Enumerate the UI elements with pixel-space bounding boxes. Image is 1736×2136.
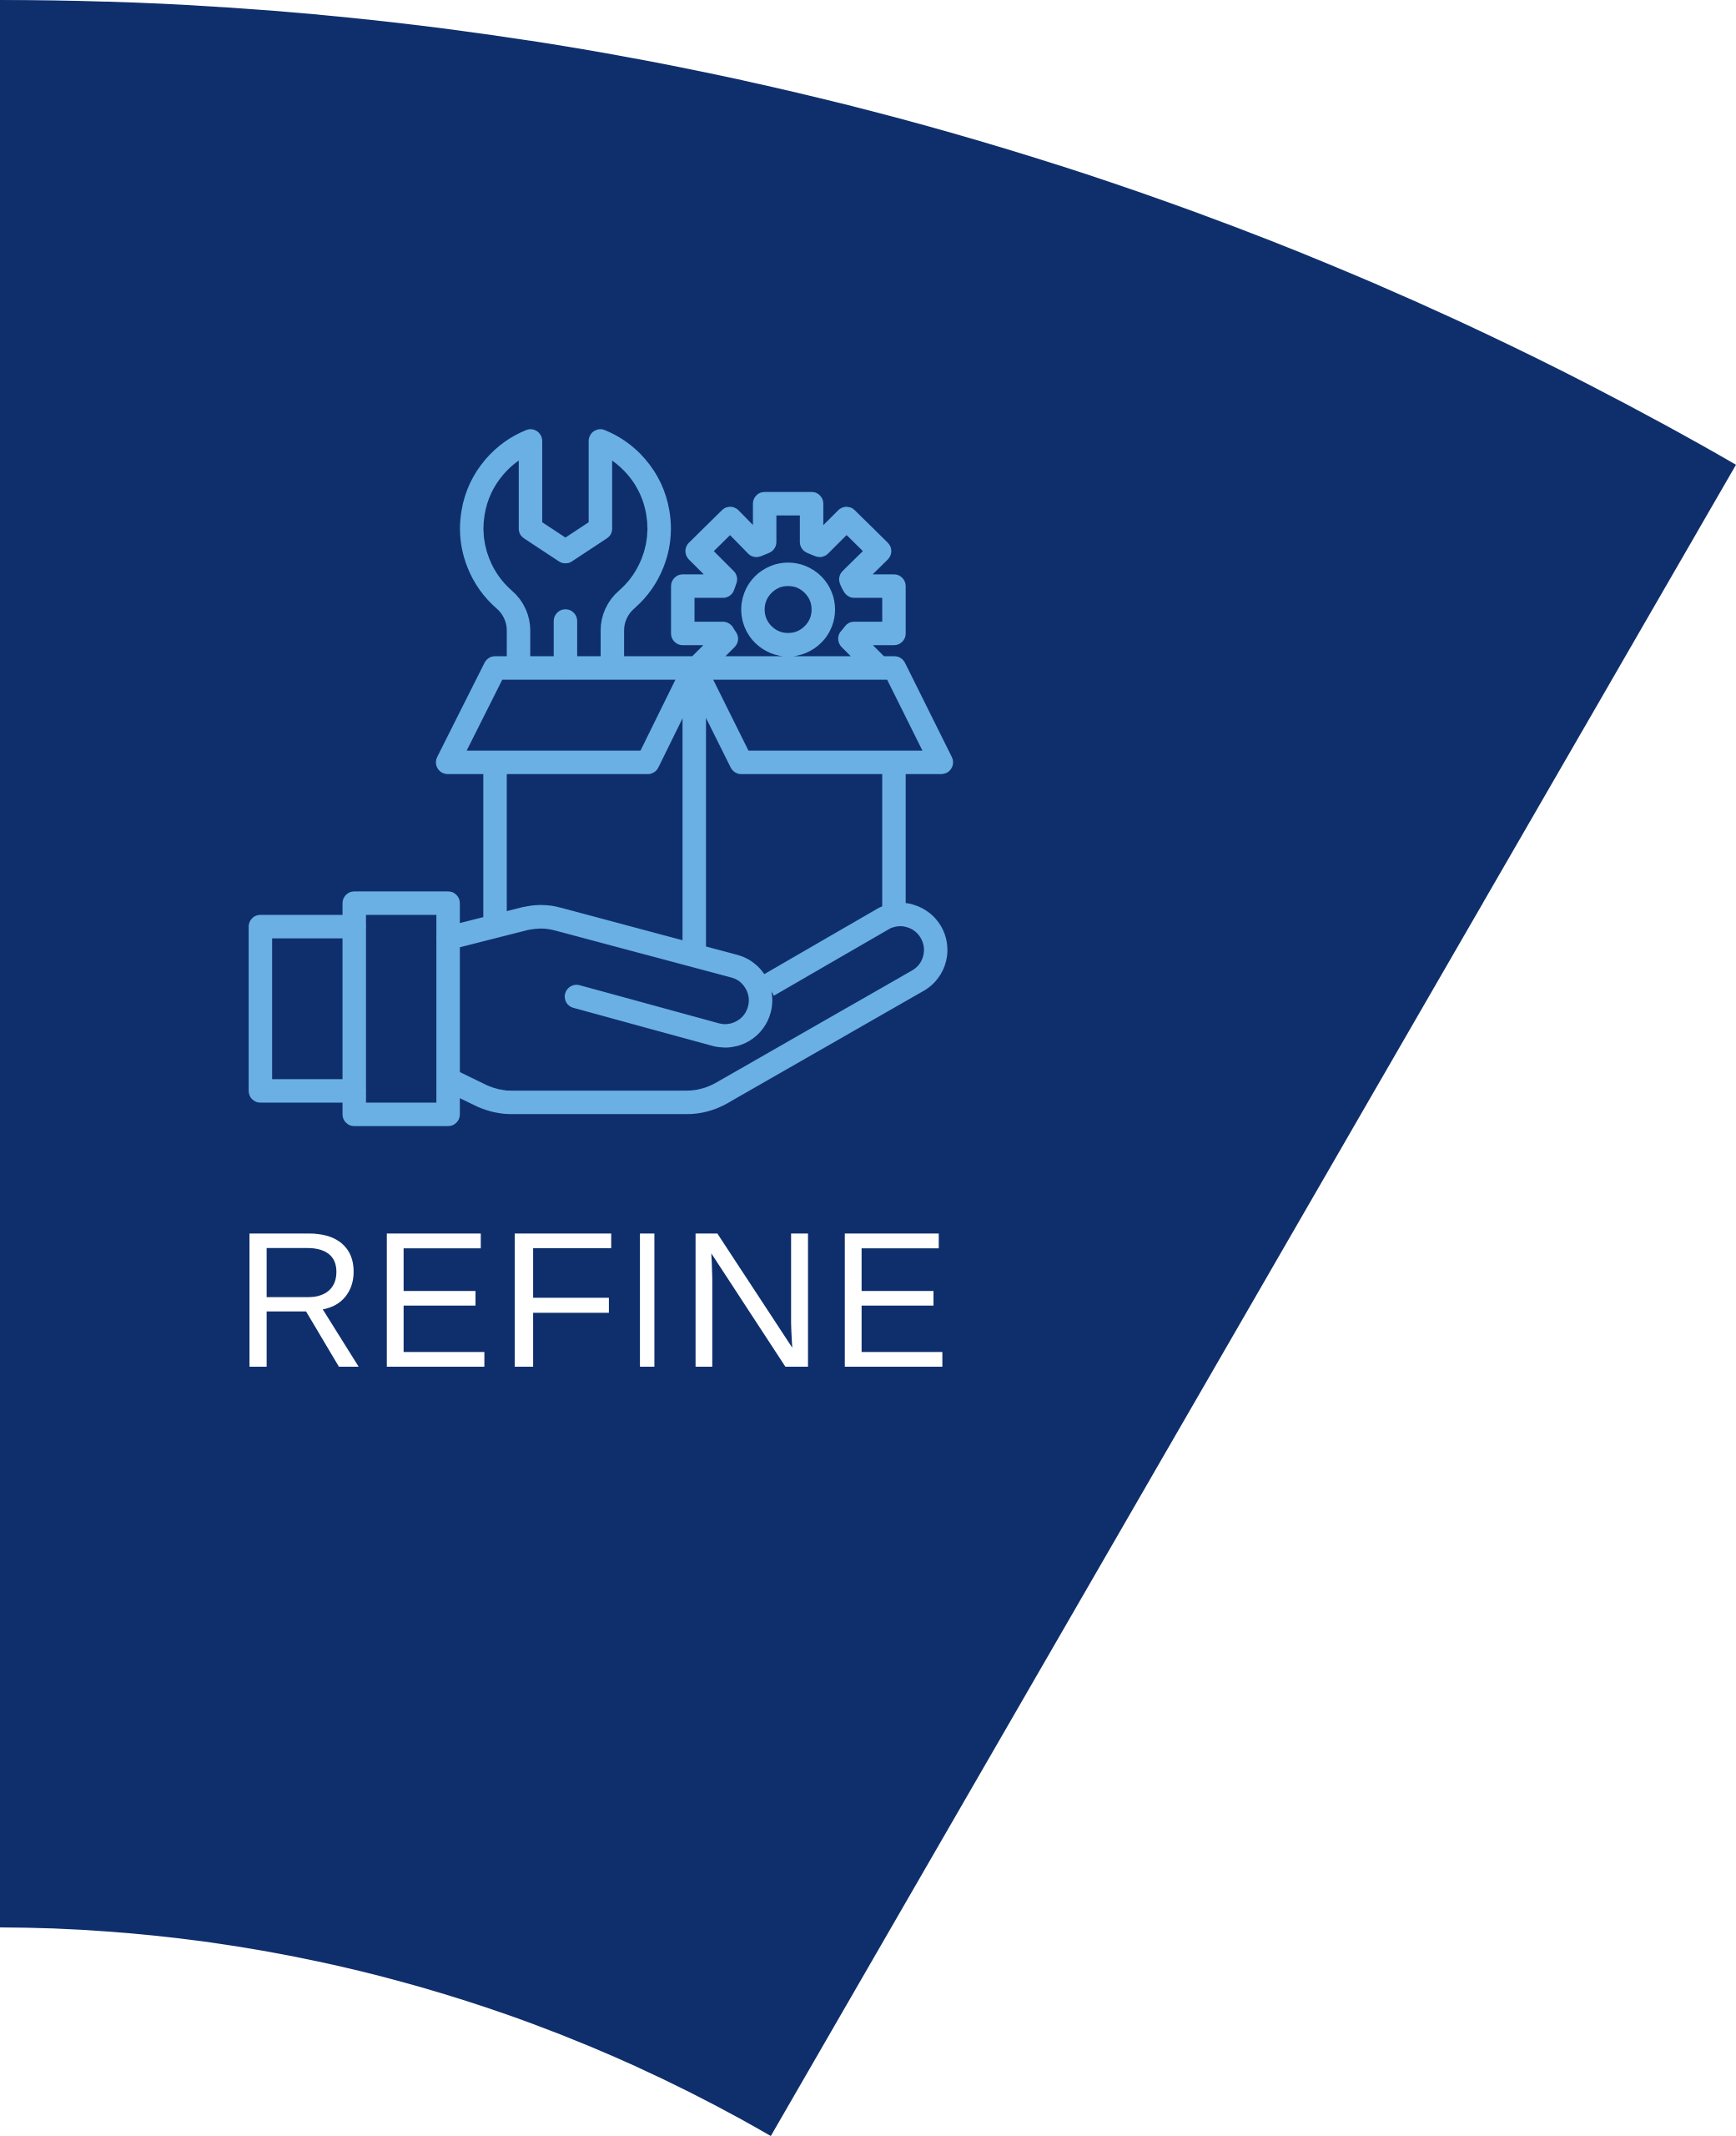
title: REFINE: E xyxy=(372,1192,492,1408)
title: REFINE: E xyxy=(830,1192,950,1408)
icon part: wrench xyxy=(472,441,659,668)
title: REFINE xyxy=(234,1191,950,1408)
icon part: gear hub xyxy=(753,574,823,645)
icon part: sleeve cuff xyxy=(260,927,355,1091)
title: REFINE: F xyxy=(499,1191,619,1408)
icon: hand holding box with wrench and gear xyxy=(260,441,941,1115)
icon part: gear outline xyxy=(682,504,894,668)
title: REFINE: N xyxy=(679,1192,824,1408)
icon part: palm and thumb xyxy=(448,917,761,1035)
icon part: box walls xyxy=(495,668,894,953)
title: REFINE: R xyxy=(234,1191,367,1408)
title: REFINE: I xyxy=(626,1191,669,1408)
icon part: sleeve band xyxy=(355,903,448,1115)
icon part: wrench centre line xyxy=(545,621,586,668)
icon part: box left flap xyxy=(448,668,694,763)
icon part: fingers and underside of hand xyxy=(448,914,936,1102)
icon part: box right flap xyxy=(694,668,941,763)
